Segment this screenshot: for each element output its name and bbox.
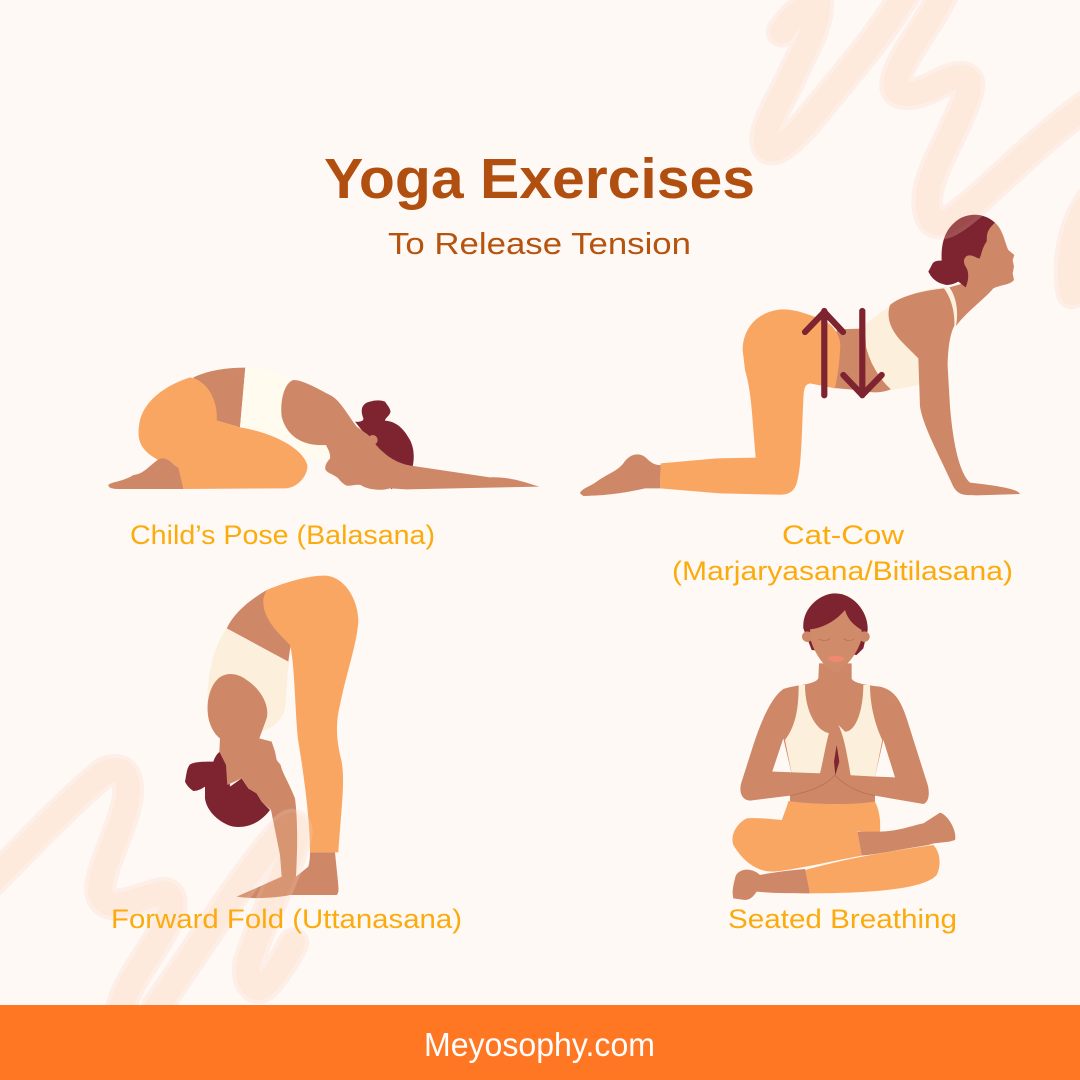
label: forward fold: Forward Fold (Uttanasana) — [111, 904, 462, 934]
arrows: up and down — [805, 311, 882, 395]
background squiggle: bottom left — [0, 770, 297, 1007]
label: cat-cow: (Marjaryasana/Bitilasana) — [672, 556, 1013, 586]
arrow: up — [805, 311, 843, 395]
figure: child's pose — [108, 368, 539, 490]
label: cat-cow — [672, 520, 1013, 586]
label: cat-cow: Cat-Cow — [782, 520, 905, 550]
label: child's pose: Child’s Pose (Balasana) — [130, 520, 435, 550]
figure: forward fold — [185, 576, 358, 898]
arrow: down — [843, 311, 882, 395]
figure: seated breathing — [732, 593, 955, 900]
figure: cat-cow — [580, 215, 1020, 496]
footer bar — [0, 1005, 1080, 1080]
label: seated breathing: Seated Breathing — [728, 904, 957, 934]
background squiggle: top right — [765, 0, 1080, 293]
subtitle: To Release Tension — [388, 226, 691, 261]
title: Yoga Exercises — [324, 147, 755, 211]
footer website text: Meyosophy.com — [424, 1026, 655, 1063]
